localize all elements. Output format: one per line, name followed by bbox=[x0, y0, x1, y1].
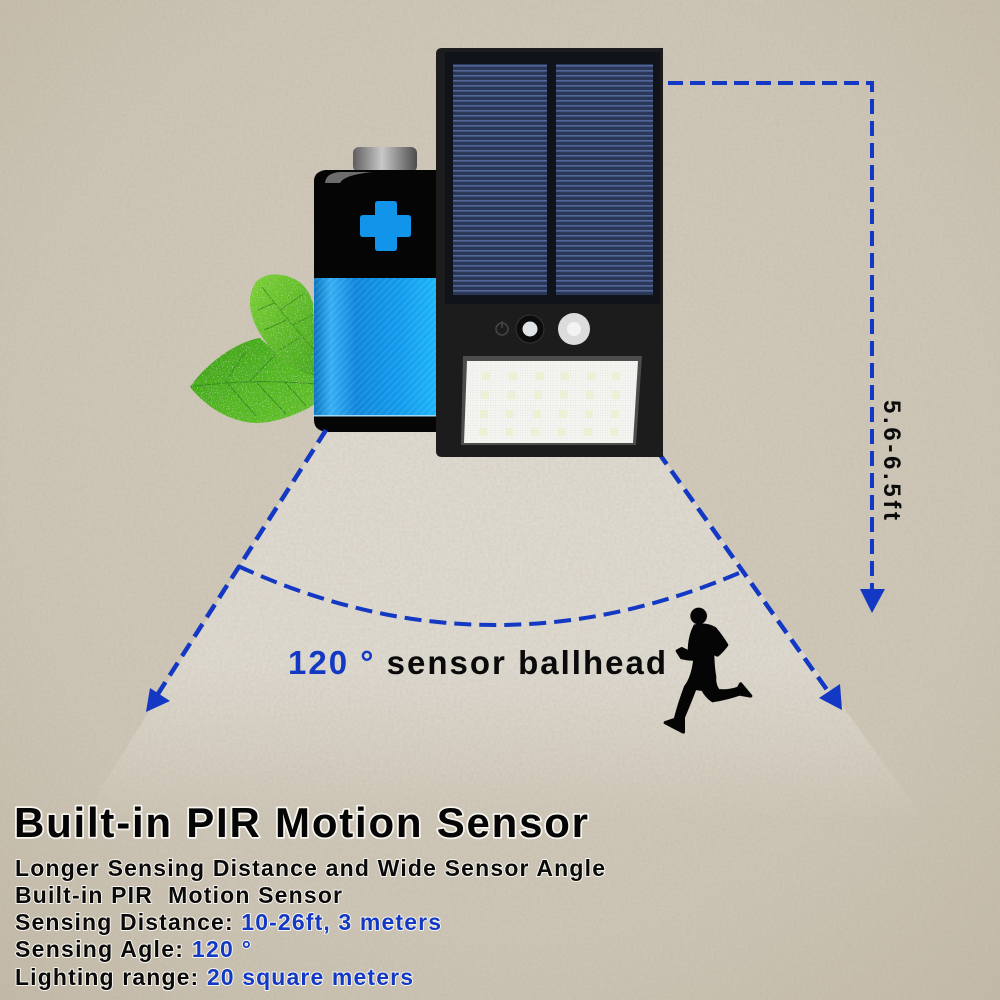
label: height 5.6-6.5ft: 5.6-6.5ft bbox=[878, 400, 905, 520]
lighting range: Lighting range: 20 square meters bbox=[15, 964, 413, 990]
feature line 1: Longer Sensing Distance and Wide Sensor Angle bbox=[15, 855, 605, 881]
lower leaf bbox=[190, 338, 316, 423]
sensing distance: Sensing Distance: 10-26ft, 3 meters bbox=[15, 909, 441, 935]
icon: plus sign on battery bbox=[360, 201, 411, 251]
text block: features bbox=[15, 855, 605, 990]
dashed arrow: left sensor edge bbox=[146, 430, 326, 712]
feature line 2: Built-in PIR Motion Sensor bbox=[15, 882, 342, 908]
dashed arc: sensor angle bbox=[238, 566, 746, 625]
icon: battery bbox=[314, 147, 436, 432]
solar cell right bbox=[556, 64, 653, 295]
upper leaf bbox=[250, 275, 316, 377]
power icon bbox=[496, 321, 508, 335]
label: 120 degree sensor ballhead: 120 ° sensor ballhead bbox=[288, 644, 666, 681]
icon: running person bbox=[665, 609, 751, 732]
dashed arrow: vertical height bbox=[668, 83, 885, 613]
icon: green leaves bbox=[190, 275, 316, 423]
product: solar wall light bbox=[436, 48, 663, 457]
dashed arrow: right sensor edge bbox=[658, 452, 842, 710]
sensing angle: Sensing Agle: 120 ° bbox=[15, 936, 251, 962]
ambient light sensor bbox=[516, 315, 544, 343]
heading: Built-in PIR Motion Sensor bbox=[14, 799, 588, 846]
PIR sensor dome bbox=[558, 313, 590, 345]
LED panel bbox=[461, 356, 642, 445]
solar cell left bbox=[453, 64, 547, 295]
